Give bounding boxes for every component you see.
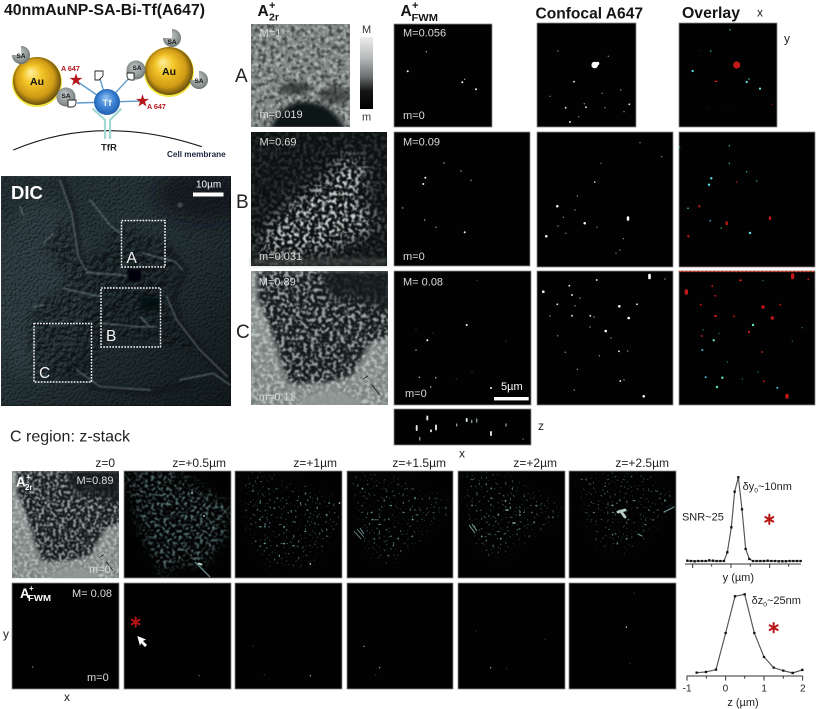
panel: A2r region C: M=0.89 bbox=[259, 276, 296, 288]
scale bar 5 µm: 5µm bbox=[501, 381, 523, 393]
A647 dye stars: A 647 bbox=[61, 64, 80, 73]
z-stack FWM plane z=0: A bbox=[20, 586, 30, 601]
biotin tags bbox=[68, 71, 134, 107]
receptor and membrane labels: Cell membrane bbox=[167, 150, 226, 159]
z-stack plane labels: z=+0.5µm bbox=[172, 456, 226, 470]
colour scale bar: M bbox=[362, 24, 371, 36]
panel: A FWM region A: M=0.056 bbox=[403, 28, 446, 40]
column heading: A+FWM: A bbox=[400, 3, 412, 20]
z-stack FWM plane z=0 bbox=[12, 583, 119, 689]
transferrin receptor bbox=[92, 108, 122, 139]
z-stack FWM plane +1.5 bbox=[347, 583, 453, 689]
z and x labels of xz projection: x bbox=[459, 446, 465, 460]
column heading: A+2r bbox=[258, 0, 279, 24]
chart: axial z profile: 2 bbox=[800, 683, 806, 694]
panel: overlay region C bbox=[679, 271, 815, 405]
panel: A2r region C bbox=[251, 271, 388, 416]
title: 40nmAuNP-SA-Bi-Tf(A647) bbox=[4, 2, 205, 19]
column heading: A+2r: + bbox=[269, 0, 275, 12]
arrow: white pointer bbox=[137, 636, 147, 647]
streptavidin markers: SA bbox=[61, 93, 71, 100]
panel: A2r region B: M=0.69 bbox=[260, 136, 296, 148]
panel: A2r region A: m=0.019 bbox=[260, 109, 303, 121]
z-stack A2r plane +2.5 bbox=[569, 471, 676, 578]
x y axis labels: y bbox=[784, 32, 790, 46]
panel: A2r region A: M=1 bbox=[260, 28, 281, 40]
z-stack plane labels: z=+1.5µm bbox=[392, 456, 446, 470]
z-stack A2r plane +0.5 bbox=[124, 471, 231, 578]
z and x labels of xz projection: z bbox=[538, 419, 544, 433]
streptavidin markers bbox=[12, 29, 208, 106]
row labels: B bbox=[236, 192, 249, 213]
streptavidin markers: SA bbox=[16, 53, 26, 60]
panel: A2r region B bbox=[251, 132, 387, 266]
selection box letters: A bbox=[126, 250, 138, 267]
panel: A2r region A bbox=[251, 24, 350, 130]
z-stack A2r plane z=0: 2r bbox=[25, 483, 33, 492]
chart: axial z profile: 0 bbox=[723, 683, 729, 694]
column heading: A+2r: 2r bbox=[269, 12, 279, 24]
DIC label and scale bar: 10µm bbox=[196, 180, 221, 190]
z and x labels of xz projection bbox=[459, 419, 544, 460]
z-stack A2r plane +2 bbox=[458, 471, 565, 578]
column heading: A+2r: A bbox=[258, 3, 269, 20]
receptor and membrane labels: TfR bbox=[101, 142, 117, 154]
panel: A2r region B: m=0.031 bbox=[259, 251, 302, 263]
z-stack A2r plane +1.5 bbox=[347, 471, 453, 578]
z-stack A2r plane z=0: M=0.89 bbox=[76, 475, 114, 487]
streptavidin markers: SA bbox=[132, 65, 142, 72]
linker lines bbox=[77, 76, 142, 103]
z-stack plane labels: z=+1µm bbox=[293, 456, 337, 470]
panel: confocal region A bbox=[537, 23, 636, 127]
panel: FWM region B: m=0 bbox=[403, 251, 425, 263]
panel: overlay region A bbox=[679, 23, 777, 127]
gold nanoparticles: Au bbox=[162, 66, 176, 78]
chart: axial z profile: z (µm) bbox=[727, 697, 759, 709]
z-stack axis labels: x bbox=[64, 690, 70, 704]
z-stack FWM plane z=0: M= 0.08 bbox=[72, 588, 112, 600]
chart: lateral y profile: y (µm) bbox=[723, 572, 754, 584]
chart: axial z profile bbox=[683, 594, 806, 709]
selection boxes A B C bbox=[34, 220, 165, 382]
column heading: A+FWM: FWM bbox=[412, 12, 438, 24]
chart: lateral y profile: δy bbox=[743, 481, 754, 493]
z-stack FWM plane z=0: + bbox=[29, 584, 34, 593]
gold nanoparticles: Au bbox=[30, 76, 44, 88]
colour scale bar: m bbox=[362, 112, 371, 124]
z-stack plane labels: z=+2.5µm bbox=[615, 456, 669, 470]
panel: FWM region B bbox=[394, 132, 530, 266]
panel: confocal region B bbox=[537, 132, 673, 267]
streptavidin markers: SA bbox=[167, 39, 177, 46]
cell membrane arc bbox=[13, 131, 202, 150]
panel: FWM region B: M=0.09 bbox=[403, 136, 440, 148]
chart: axial z profile: ~25nm bbox=[767, 595, 801, 607]
panel: A2r region C: m=0.11 bbox=[259, 392, 295, 404]
panel: FWM region C bbox=[394, 271, 531, 405]
column heading: A+FWM: + bbox=[412, 0, 418, 12]
panel: FWM region C: m=0 bbox=[405, 388, 427, 400]
z-stack FWM plane +1 bbox=[235, 583, 342, 689]
panel: confocal region C bbox=[537, 271, 673, 405]
chart: axial z profile: 0 bbox=[763, 602, 767, 609]
z-stack FWM plane z=0: m=0 bbox=[87, 672, 109, 684]
streptavidin markers: SA bbox=[194, 78, 204, 85]
z-stack plane labels bbox=[95, 456, 669, 470]
z-stack axis labels bbox=[3, 627, 70, 704]
z-stack FWM plane +2.5 bbox=[569, 583, 676, 689]
z-stack FWM plane z=0: FWM bbox=[28, 594, 51, 603]
row labels: A bbox=[235, 66, 248, 87]
z-stack A2r plane z=0: A bbox=[16, 474, 26, 490]
z-stack plane labels: z=+2µm bbox=[513, 456, 557, 470]
heading: C region z-stack: C region: z-stack bbox=[10, 428, 131, 446]
z-stack plane labels: z=0 bbox=[95, 456, 115, 470]
icon: red asterisk marker bbox=[132, 618, 140, 626]
z-stack FWM plane +0.5 with marked particle bbox=[124, 583, 231, 689]
panel: A FWM region A bbox=[394, 24, 492, 127]
x y axis labels bbox=[757, 6, 790, 46]
panel: overlay region B bbox=[679, 132, 815, 267]
transferrin sphere bbox=[94, 89, 120, 115]
column heading: confocal: Confocal A647 bbox=[536, 6, 643, 22]
row labels: C bbox=[236, 322, 250, 343]
chart: lateral y profile: 0 bbox=[754, 488, 758, 495]
selection box letters: C bbox=[39, 365, 50, 382]
x y axis labels: x bbox=[757, 6, 763, 20]
panel: FWM region C: M= 0.08 bbox=[403, 276, 443, 288]
z-stack A2r plane z=0: + bbox=[26, 473, 31, 482]
panel: A FWM region A: m=0 bbox=[403, 110, 425, 122]
A647 dye stars bbox=[61, 64, 166, 111]
diagram: gold nanoparticle conjugate on transferrin receptor bbox=[12, 29, 226, 159]
row labels bbox=[235, 66, 250, 343]
chart: axial z profile: -1 bbox=[683, 683, 692, 694]
z-stack A2r plane +1 bbox=[235, 471, 342, 578]
chart: lateral y profile: SNR~25 bbox=[682, 512, 724, 524]
DIC label and scale bar: DIC bbox=[11, 182, 43, 203]
chart: axial z profile: δz bbox=[752, 595, 763, 607]
A647 dye stars: A 647 bbox=[147, 102, 166, 111]
colour scale bar bbox=[360, 24, 373, 124]
receptor and membrane labels bbox=[101, 142, 226, 159]
chart: lateral y profile: ~10nm bbox=[758, 481, 792, 493]
selection box letters: B bbox=[106, 328, 116, 345]
DIC microscopy panel bbox=[1, 176, 231, 406]
z-stack FWM plane +2 bbox=[458, 583, 565, 689]
column heading: A+FWM bbox=[400, 0, 438, 24]
z-stack axis labels: y bbox=[3, 627, 9, 641]
z-stack A2r plane z=0 bbox=[12, 471, 119, 587]
chart: axial z profile: 1 bbox=[761, 683, 767, 694]
gold nanoparticles bbox=[12, 47, 194, 107]
column heading: overlay: Overlay bbox=[682, 5, 740, 22]
panel: xz projection bbox=[394, 409, 531, 445]
selection box letters bbox=[39, 250, 138, 382]
chart: lateral y profile bbox=[682, 477, 801, 584]
transferrin sphere: Tf bbox=[103, 98, 112, 109]
z-stack A2r plane z=0: m=0 bbox=[89, 564, 111, 576]
DIC label and scale bar bbox=[12, 180, 224, 199]
